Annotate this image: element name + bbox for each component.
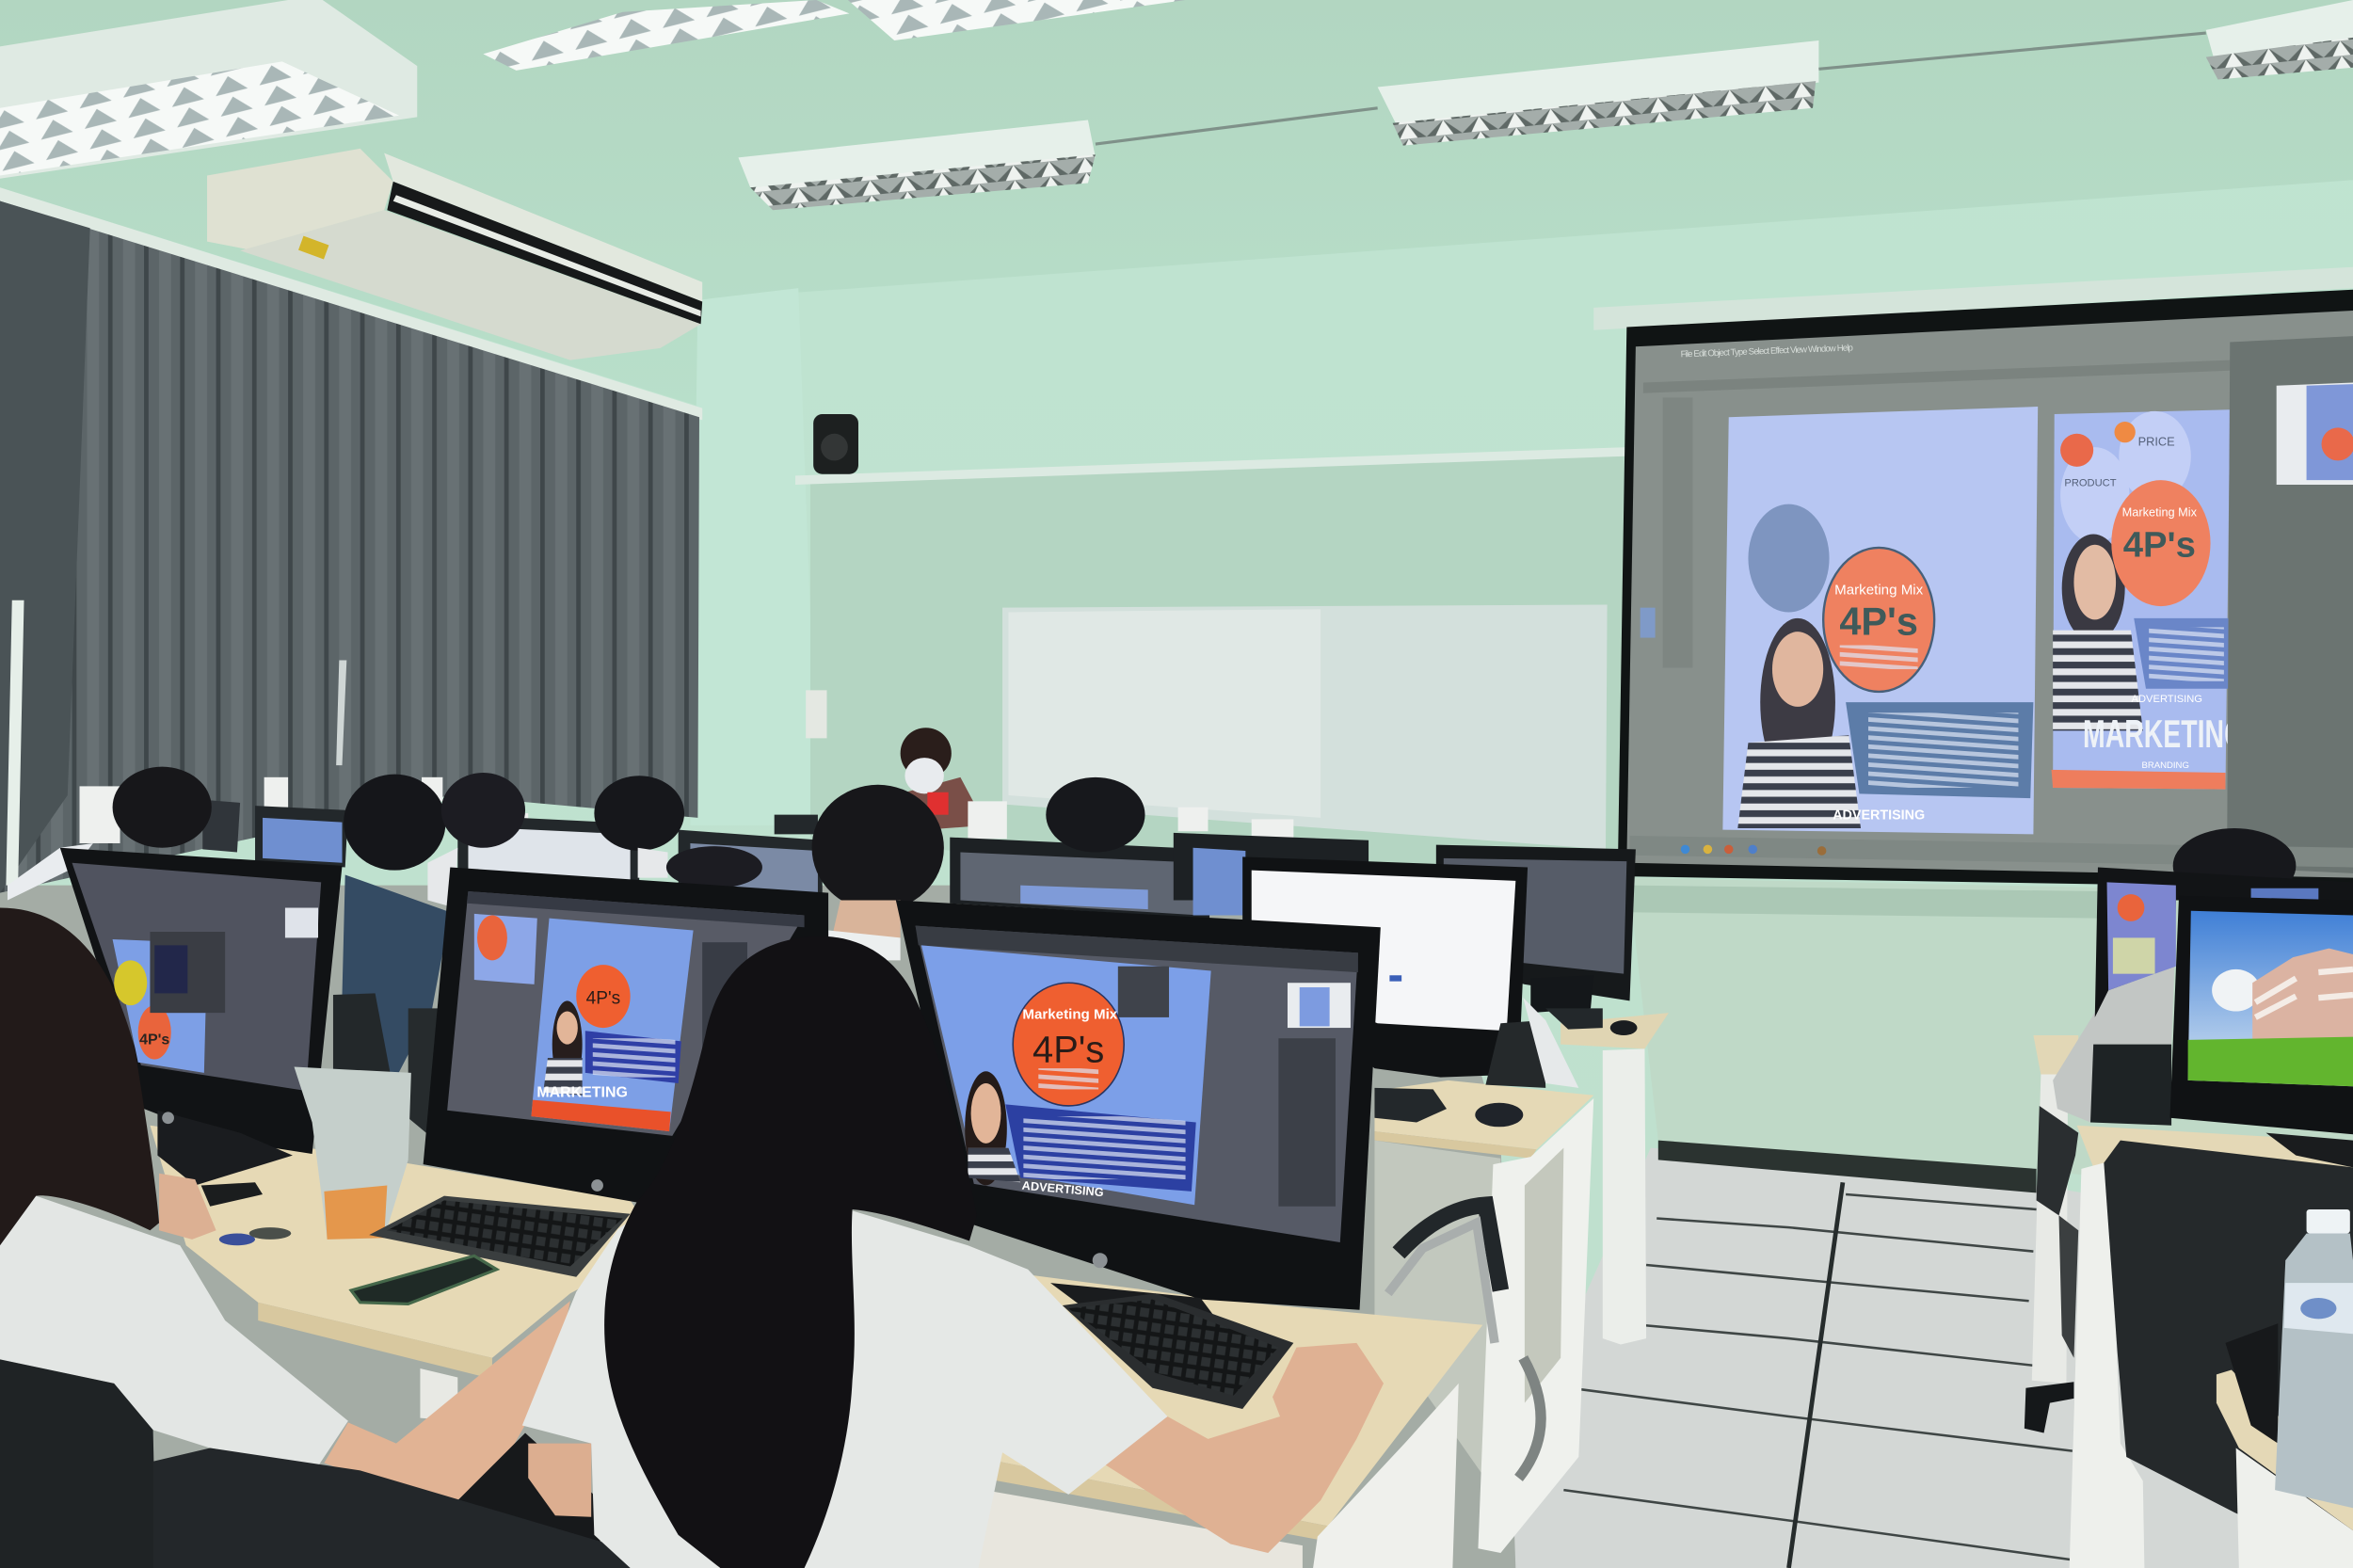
right lower wall bbox=[1628, 878, 2353, 1200]
projected poster right: MARKETING bbox=[2083, 712, 2245, 756]
wall shadow under screen bbox=[1628, 886, 2101, 919]
hair bbox=[0, 908, 159, 1245]
centre desk bbox=[975, 1268, 1482, 1568]
speaker bbox=[813, 414, 858, 474]
back row monitors bbox=[202, 800, 1636, 1000]
projected poster left: Marketing Mix bbox=[1834, 582, 1924, 598]
right desk and chairs bbox=[2025, 1035, 2353, 1568]
keyboards and mouse on rear desk bbox=[1374, 1008, 1637, 1127]
long hair bbox=[604, 936, 977, 1568]
wall switch bbox=[806, 690, 827, 738]
projected poster left: ADVERTISING bbox=[1833, 808, 1925, 823]
left monitor: 4P's bbox=[139, 1032, 169, 1048]
centre-left monitor: 4P's bbox=[586, 989, 620, 1009]
back row people bbox=[8, 767, 1145, 960]
projector screen bbox=[1593, 267, 2353, 888]
left arm bbox=[528, 1444, 591, 1517]
water bottle bbox=[2275, 1209, 2353, 1508]
left monitor bbox=[60, 848, 343, 1185]
board rail bbox=[795, 447, 1628, 485]
ceiling lights bbox=[0, 0, 2353, 210]
projected poster right: ADVERTISING bbox=[2132, 694, 2202, 705]
chair behind right monitor bbox=[2090, 1045, 2171, 1126]
bag on desk bbox=[2225, 1323, 2278, 1444]
right monitor with desktop wallpaper bbox=[2169, 896, 2353, 1167]
front centre student bbox=[522, 936, 1384, 1568]
screen side panel bbox=[2227, 336, 2353, 873]
centre monitor bbox=[896, 901, 1381, 1328]
teacher bbox=[886, 728, 986, 833]
left desk bbox=[150, 1126, 661, 1421]
ceiling bbox=[0, 0, 2353, 408]
projected poster left: 4P's bbox=[1839, 599, 1918, 643]
armrest chair bbox=[1388, 1205, 1500, 1343]
poster badge on monitor bbox=[1013, 983, 1124, 1106]
mid-ground shadow behind desks bbox=[0, 886, 1515, 1568]
projected poster left bbox=[1722, 407, 2038, 834]
floor tiles bbox=[1500, 1148, 2353, 1568]
shirt bbox=[522, 1200, 1167, 1568]
front right chair bbox=[2104, 1141, 2353, 1568]
poster badge on monitor: Marketing Mix bbox=[1022, 1007, 1118, 1023]
curtain bbox=[0, 187, 702, 893]
centre-left keyboard bbox=[369, 1196, 631, 1277]
poster badge on monitor: 4P's bbox=[1032, 1030, 1104, 1071]
right student bbox=[2053, 828, 2296, 1123]
baseboard bbox=[1658, 1141, 2037, 1192]
denim jacket student bbox=[343, 874, 450, 1083]
hand bbox=[159, 1174, 216, 1240]
chair backs middle bbox=[333, 993, 1578, 1141]
right arm bbox=[1100, 1343, 1384, 1553]
projected poster right: 4P's bbox=[2123, 524, 2196, 565]
projected poster right: PRODUCT bbox=[2064, 478, 2117, 489]
left student bbox=[0, 908, 570, 1500]
lower back wall bbox=[810, 453, 1636, 901]
centre monitor: ADVERTISING bbox=[1021, 1178, 1104, 1199]
whiteboard bbox=[1002, 604, 1608, 849]
smartphone bbox=[351, 1256, 497, 1304]
screen menu bar: File Edit Object Type Select Effect View Window Help bbox=[1680, 343, 1853, 360]
air conditioner bbox=[207, 149, 702, 360]
front right desk bbox=[2217, 1370, 2353, 1568]
centre-left monitor bbox=[424, 867, 828, 1215]
centre keyboard bbox=[1063, 1293, 1293, 1409]
projected poster right: PRICE bbox=[2138, 434, 2175, 448]
shirt bbox=[0, 1196, 348, 1466]
screen taskbar bbox=[1630, 836, 2353, 867]
wall column bbox=[690, 288, 818, 825]
small phone and keys bbox=[201, 1182, 291, 1245]
projected poster right bbox=[2052, 409, 2245, 790]
name cards on monitors bbox=[80, 777, 1293, 867]
rear desks bbox=[1374, 1013, 1669, 1553]
centre-left monitor: MARKETING bbox=[536, 1084, 628, 1100]
right rear monitor bbox=[2095, 867, 2353, 1017]
projected poster right: BRANDING bbox=[2141, 760, 2189, 771]
arm bbox=[324, 1301, 570, 1500]
projected poster right: Marketing Mix bbox=[2122, 504, 2198, 519]
cup bbox=[294, 1067, 411, 1240]
white screen monitor bbox=[1242, 856, 1593, 1078]
front left chairs bbox=[0, 1359, 690, 1568]
